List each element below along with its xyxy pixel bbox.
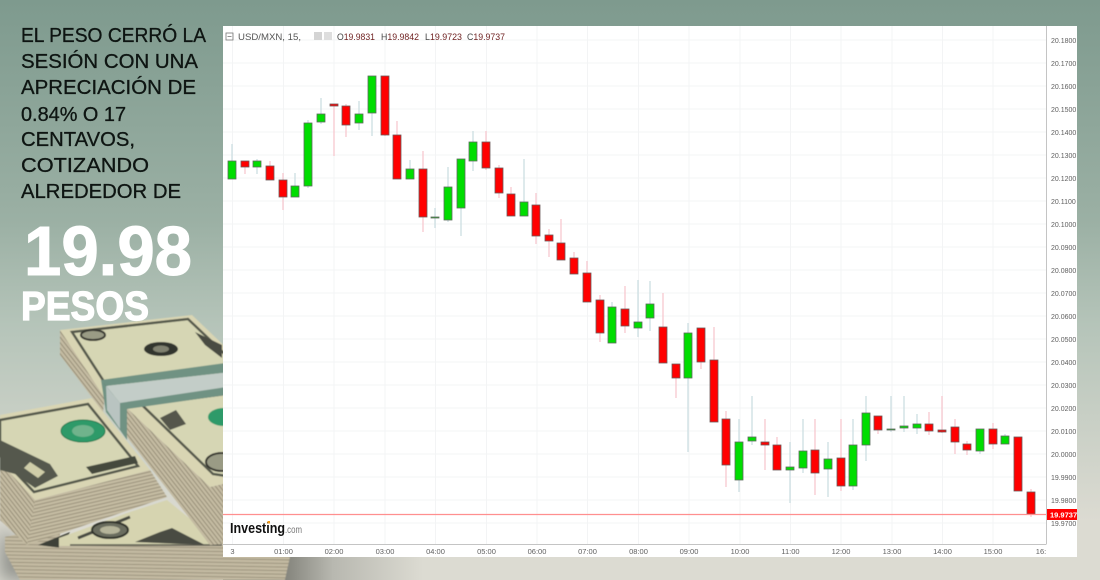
price axis labels: 20.1200	[1051, 176, 1076, 183]
price axis labels: 20.0200	[1051, 406, 1076, 413]
background shadow below chart	[223, 557, 423, 580]
soft shadow	[0, 525, 70, 580]
green seal	[61, 420, 105, 442]
price axis labels: 20.1400	[1051, 130, 1076, 137]
price axis labels: 20.0100	[1051, 429, 1076, 436]
grid lines	[223, 26, 1046, 544]
price axis labels: 19.9700	[1051, 521, 1076, 528]
time axis labels: 12:00	[832, 547, 850, 556]
time axis labels: 11:00	[781, 547, 800, 556]
green candle wicks	[232, 76, 1005, 503]
price axis labels: 20.0900	[1051, 245, 1076, 252]
time axis labels: 14:00	[933, 547, 952, 556]
red candle wicks	[245, 76, 1031, 517]
time axis labels: 04:00	[426, 547, 445, 556]
price axis labels: 20.1100	[1051, 199, 1076, 206]
price axis labels: 20.0500	[1051, 337, 1076, 344]
headline text: SESIÓN CON UNA	[21, 50, 199, 73]
headline text: EL PESO CERRÓ LA	[21, 24, 207, 47]
top stack	[60, 315, 260, 412]
price axis labels: 19.9900	[1051, 475, 1076, 482]
headline text: ALREDEDOR DE	[21, 181, 181, 203]
price axis labels	[1051, 38, 1076, 528]
time axis labels: 10:00	[731, 547, 749, 556]
price axis labels: 20.0000	[1051, 452, 1076, 459]
bottom front stack	[59, 500, 290, 580]
green candle bodies	[228, 76, 1009, 486]
price axis labels: 20.0800	[1051, 268, 1076, 275]
price axis labels: 20.1700	[1051, 61, 1076, 68]
time axis labels: 01:00	[274, 547, 293, 556]
chart legend: symbol and OHLC values: USD/MXN, 15,	[238, 32, 301, 43]
logo: Investing.com: Investing	[230, 521, 285, 537]
time axis labels: 03:00	[376, 547, 394, 556]
chart legend: symbol and OHLC values: C19.9737	[467, 32, 505, 43]
price axis labels: 20.1000	[1051, 222, 1076, 229]
price axis labels: 20.1300	[1051, 153, 1076, 160]
price axis labels: 20.1600	[1051, 84, 1076, 91]
time axis labels: 06:00	[528, 547, 546, 556]
big value: 19.98 pesos	[21, 212, 192, 329]
time axis labels: 08:00	[629, 547, 648, 556]
chart legend: symbol and OHLC values: O19.9831	[337, 32, 375, 43]
middle stack	[0, 398, 167, 545]
headline text	[20, 24, 207, 203]
paper band	[101, 361, 240, 440]
logo: Investing.com: .com	[285, 525, 302, 536]
time axis labels: 09:00	[680, 547, 698, 556]
time axis labels: 13:00	[883, 547, 901, 556]
time axis labels: 05:00	[477, 547, 496, 556]
illustration: stacks of dollar bills	[0, 314, 290, 580]
black seal	[144, 342, 178, 356]
time axis labels	[230, 547, 1046, 556]
big value: 19.98 pesos: 19.98	[24, 212, 192, 290]
red candle bodies	[241, 76, 1035, 514]
time axis labels: 07:00	[578, 547, 597, 556]
axes	[223, 26, 1046, 544]
big value: 19.98 pesos: PESOS	[21, 283, 149, 329]
chart legend: symbol and OHLC values: H19.9842	[381, 32, 419, 43]
headline text: COTIZANDO	[21, 155, 149, 177]
price axis labels: 20.1800	[1051, 38, 1076, 45]
price axis labels: 20.0600	[1051, 314, 1076, 321]
headline text: CENTAVOS,	[21, 129, 135, 151]
price axis labels: 20.0300	[1051, 383, 1076, 390]
price axis labels: 20.0700	[1051, 291, 1076, 298]
headline text: APRECIACIÓN DE	[21, 76, 196, 99]
bottom left stack	[5, 525, 70, 580]
current price tag: 19.9737	[1050, 510, 1077, 520]
time axis labels: 02:00	[325, 547, 343, 556]
chart legend: symbol and OHLC values: L19.9723	[425, 32, 462, 43]
price axis labels: 20.0400	[1051, 360, 1076, 367]
right stack	[127, 390, 240, 545]
time axis labels: 15:00	[984, 547, 1002, 556]
time axis labels: 16:	[1036, 547, 1046, 556]
price axis labels: 20.1500	[1051, 107, 1076, 114]
headline text: 0.84% O 17	[21, 104, 126, 126]
time axis labels: 3	[230, 547, 235, 556]
current price line	[223, 514, 1046, 516]
chart legend: symbol and OHLC values	[226, 32, 505, 43]
price axis labels: 19.9800	[1051, 498, 1076, 505]
